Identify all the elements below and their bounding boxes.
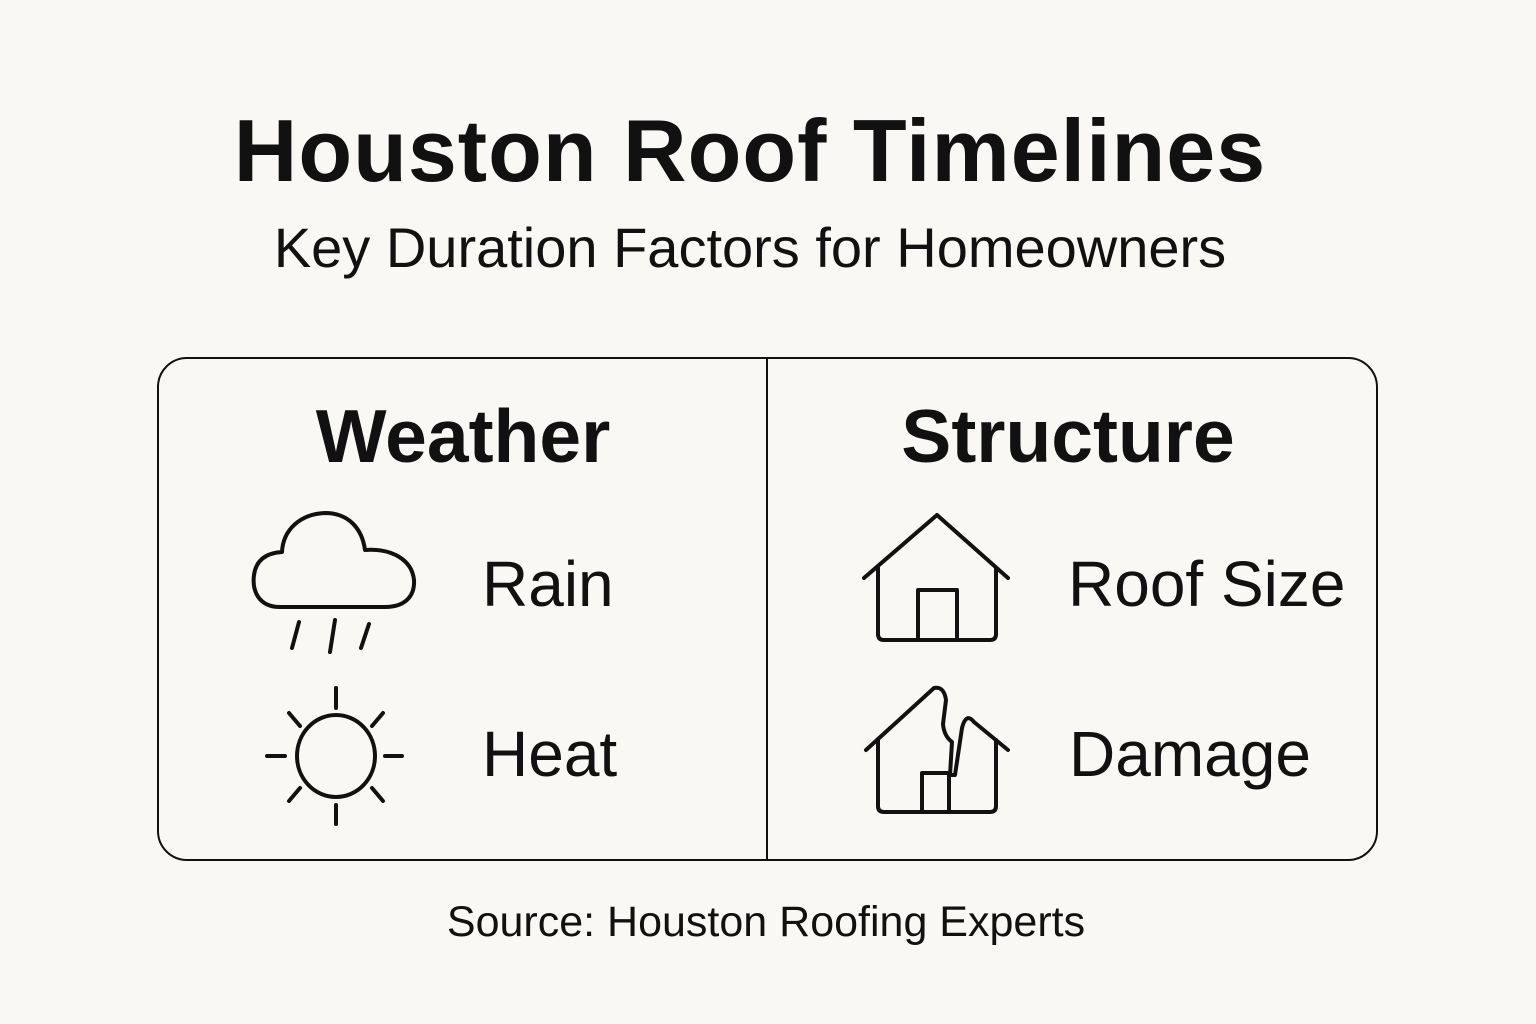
title: Houston Roof Timelines — [234, 101, 1266, 200]
label: Rain: Rain — [482, 548, 614, 620]
label: Roof Size: Roof Size — [1068, 548, 1345, 620]
icon: sun — [267, 688, 402, 824]
icon: damaged house — [866, 688, 1008, 812]
subtitle: Key Duration Factors for Homeowners — [274, 216, 1226, 279]
panel: factors box — [157, 357, 1378, 861]
icon: house — [864, 515, 1008, 640]
icon: rain cloud — [254, 513, 414, 652]
label: Damage: Damage — [1069, 718, 1311, 790]
source note: Source: Houston Roofing Experts — [447, 898, 1085, 946]
heading: Weather: Weather — [316, 394, 610, 478]
heading: Structure: Structure — [901, 394, 1235, 478]
label: Heat: Heat — [482, 718, 617, 790]
